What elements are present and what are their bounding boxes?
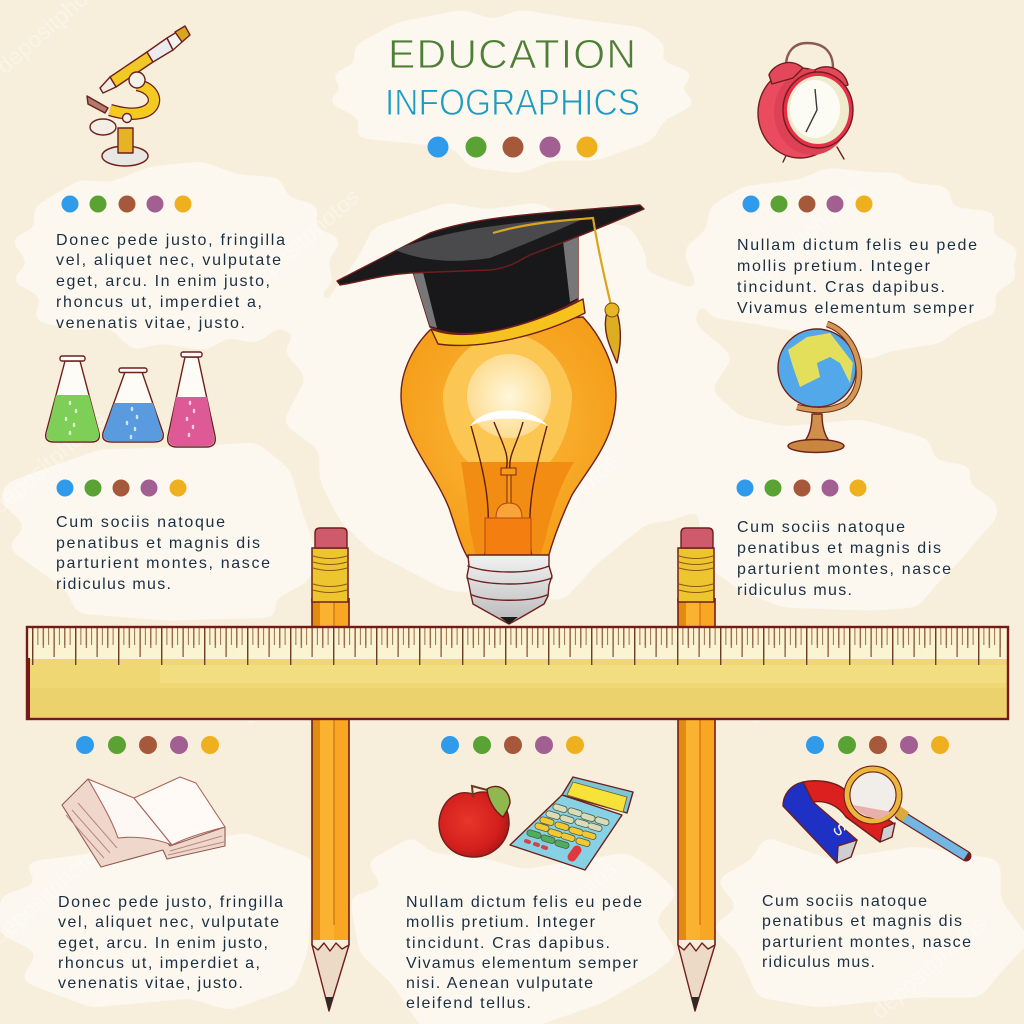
text block bbox=[58, 894, 283, 992]
text block: penatibus et magnis dis bbox=[762, 913, 962, 930]
text block: Donec pede justo, fringilla bbox=[58, 894, 283, 911]
pencil wood tip bbox=[678, 943, 715, 1011]
microscope mirror bbox=[90, 119, 116, 135]
clock handle bbox=[786, 43, 833, 68]
calculator body bbox=[510, 795, 622, 870]
panel: bottom middle text bbox=[406, 736, 642, 1012]
microscope base bbox=[102, 146, 148, 166]
microscope column bbox=[118, 128, 133, 153]
pencil eraser bbox=[315, 528, 347, 548]
dots bbox=[76, 736, 219, 754]
dots bbox=[441, 736, 584, 754]
text block: nisi. Aenean vulputate bbox=[406, 975, 593, 992]
pencil: right bbox=[678, 528, 715, 1012]
clock back body bbox=[758, 68, 842, 158]
dots bbox=[806, 736, 949, 754]
title colour dots bbox=[428, 136, 598, 158]
cap gold band bbox=[431, 299, 585, 345]
light bulb bbox=[401, 317, 616, 624]
icon: calculator bbox=[510, 777, 633, 870]
text block bbox=[406, 894, 642, 1012]
panel: middle right text bbox=[736, 480, 951, 599]
watermark: depositphotos bbox=[496, 855, 621, 969]
cap tassel bbox=[605, 312, 620, 363]
green flask bbox=[46, 356, 99, 442]
text block bbox=[56, 232, 285, 332]
cap cord bbox=[493, 218, 611, 305]
microscope arm bbox=[110, 85, 154, 114]
panel: bottom right text bbox=[762, 736, 971, 971]
text block: penatibus et magnis dis bbox=[56, 535, 260, 552]
text block: vel, aliquet nec, vulputate bbox=[58, 914, 279, 931]
text block: Nullam dictum felis eu pede bbox=[406, 894, 642, 911]
book left page bbox=[88, 779, 172, 845]
globe land bbox=[788, 333, 853, 387]
globe stand bbox=[804, 414, 830, 442]
icon: flasks bbox=[46, 352, 215, 447]
apple fruit bbox=[439, 792, 509, 857]
clock face bbox=[783, 72, 853, 148]
dots bbox=[56, 480, 186, 496]
ruler bbox=[26, 627, 1008, 719]
ruler tick marks bbox=[32, 628, 1004, 665]
bulb lower shade bbox=[461, 462, 574, 556]
title: EDUCATION bbox=[388, 31, 636, 77]
text block: ridiculus mus. bbox=[737, 582, 852, 599]
icon: horseshoe magnet bbox=[783, 781, 895, 863]
globe sphere bbox=[778, 329, 856, 407]
watermark: depositphotos bbox=[741, 180, 866, 294]
pencil body bbox=[312, 598, 349, 940]
graduation cap bbox=[337, 205, 644, 363]
magnet pole label: S bbox=[829, 821, 849, 840]
text block: ridiculus mus. bbox=[762, 954, 875, 971]
watermark: depositphotos bbox=[866, 910, 991, 1024]
magnet red end bbox=[880, 823, 895, 842]
text block: penatibus et magnis dis bbox=[737, 540, 941, 557]
text block: vel, aliquet nec, vulputate bbox=[56, 252, 281, 269]
text block: Cum sociis natoque bbox=[56, 514, 225, 531]
pencil: left bbox=[312, 528, 349, 1012]
calculator lid bbox=[562, 777, 633, 813]
text block: venenatis vitae, justo. bbox=[56, 315, 245, 332]
icon: magnifying glass bbox=[847, 769, 966, 856]
text block: eget, arcu. In enim justo, bbox=[58, 935, 268, 952]
text block bbox=[56, 514, 270, 593]
bulb screw base bbox=[467, 555, 552, 624]
icon: microscope bbox=[87, 26, 190, 166]
watermark: depositphotos bbox=[498, 448, 623, 562]
text block: Vivamus elementum semper bbox=[737, 300, 975, 317]
text block bbox=[737, 237, 977, 317]
watermark: depositphotos bbox=[741, 615, 866, 729]
text block: rhoncus ut, imperdiet a, bbox=[56, 294, 262, 311]
bulb glass bbox=[401, 317, 616, 558]
panel: bottom left text bbox=[58, 736, 283, 992]
text block: eleifend tellus. bbox=[406, 995, 531, 1012]
text block: tincidunt. Cras dapibus. bbox=[406, 935, 610, 952]
text block: Cum sociis natoque bbox=[737, 519, 905, 536]
cap board bbox=[337, 205, 644, 285]
title bbox=[385, 31, 640, 123]
dots bbox=[736, 480, 866, 496]
text block: mollis pretium. Integer bbox=[737, 258, 931, 275]
text block: parturient montes, nasce bbox=[737, 561, 951, 578]
pink flask bbox=[168, 352, 215, 447]
apple stem bbox=[472, 786, 487, 797]
text block bbox=[762, 893, 971, 971]
pencil eraser bbox=[681, 528, 713, 548]
watermark: depositphotos bbox=[239, 183, 364, 297]
book right page bbox=[134, 777, 225, 845]
apple leaf bbox=[487, 786, 510, 817]
dots bbox=[742, 196, 872, 212]
watermark: depositphotos bbox=[236, 615, 361, 729]
calculator screen bbox=[567, 782, 627, 812]
bulb glow bbox=[443, 334, 572, 462]
pencil body bbox=[678, 598, 715, 940]
panel: middle left text bbox=[56, 480, 270, 593]
bulb filament bbox=[471, 422, 547, 558]
text block: eget, arcu. In enim justo, bbox=[56, 273, 270, 290]
panel: top right text bbox=[737, 196, 977, 317]
globe meridian arc bbox=[797, 324, 859, 410]
text block: parturient montes, nasce bbox=[762, 934, 971, 951]
text block: venenatis vitae, justo. bbox=[58, 975, 243, 992]
icon: alarm clock bbox=[758, 43, 853, 162]
text block: Donec pede justo, fringilla bbox=[56, 232, 285, 249]
microscope stage bbox=[87, 96, 108, 113]
text block: Cum sociis natoque bbox=[762, 893, 927, 910]
blue flask bbox=[103, 368, 163, 442]
magnet blue end bbox=[837, 840, 857, 863]
panel: top left text bbox=[56, 196, 285, 332]
book page stack bbox=[62, 779, 225, 867]
icon: apple bbox=[439, 786, 510, 857]
icon: globe bbox=[778, 324, 859, 452]
clock feet bbox=[783, 147, 844, 162]
cap body bbox=[413, 232, 578, 333]
text block: mollis pretium. Integer bbox=[406, 914, 596, 931]
icon: open book bbox=[62, 777, 225, 867]
text block: rhoncus ut, imperdiet a, bbox=[58, 955, 260, 972]
magnifier handle bbox=[900, 815, 966, 856]
pencil wood tip bbox=[312, 943, 349, 1011]
magnet red arm bbox=[803, 781, 893, 842]
pencil ferrule bbox=[312, 548, 348, 602]
text block: tincidunt. Cras dapibus. bbox=[737, 279, 945, 296]
pencil ferrule bbox=[678, 548, 714, 602]
dots bbox=[62, 196, 192, 212]
calculator buttons bbox=[526, 807, 606, 857]
magnet blue arm bbox=[783, 782, 857, 863]
text block: ridiculus mus. bbox=[56, 576, 171, 593]
title: INFOGRAPHICS bbox=[385, 82, 640, 123]
text block: Vivamus elementum semper bbox=[406, 955, 639, 972]
magnifier lens bbox=[847, 769, 899, 821]
text block bbox=[737, 519, 951, 599]
clock bells bbox=[769, 62, 803, 84]
clock hands bbox=[806, 89, 817, 132]
text block: parturient montes, nasce bbox=[56, 555, 270, 572]
microscope tube bbox=[110, 52, 153, 87]
text block: Nullam dictum felis eu pede bbox=[737, 237, 977, 254]
